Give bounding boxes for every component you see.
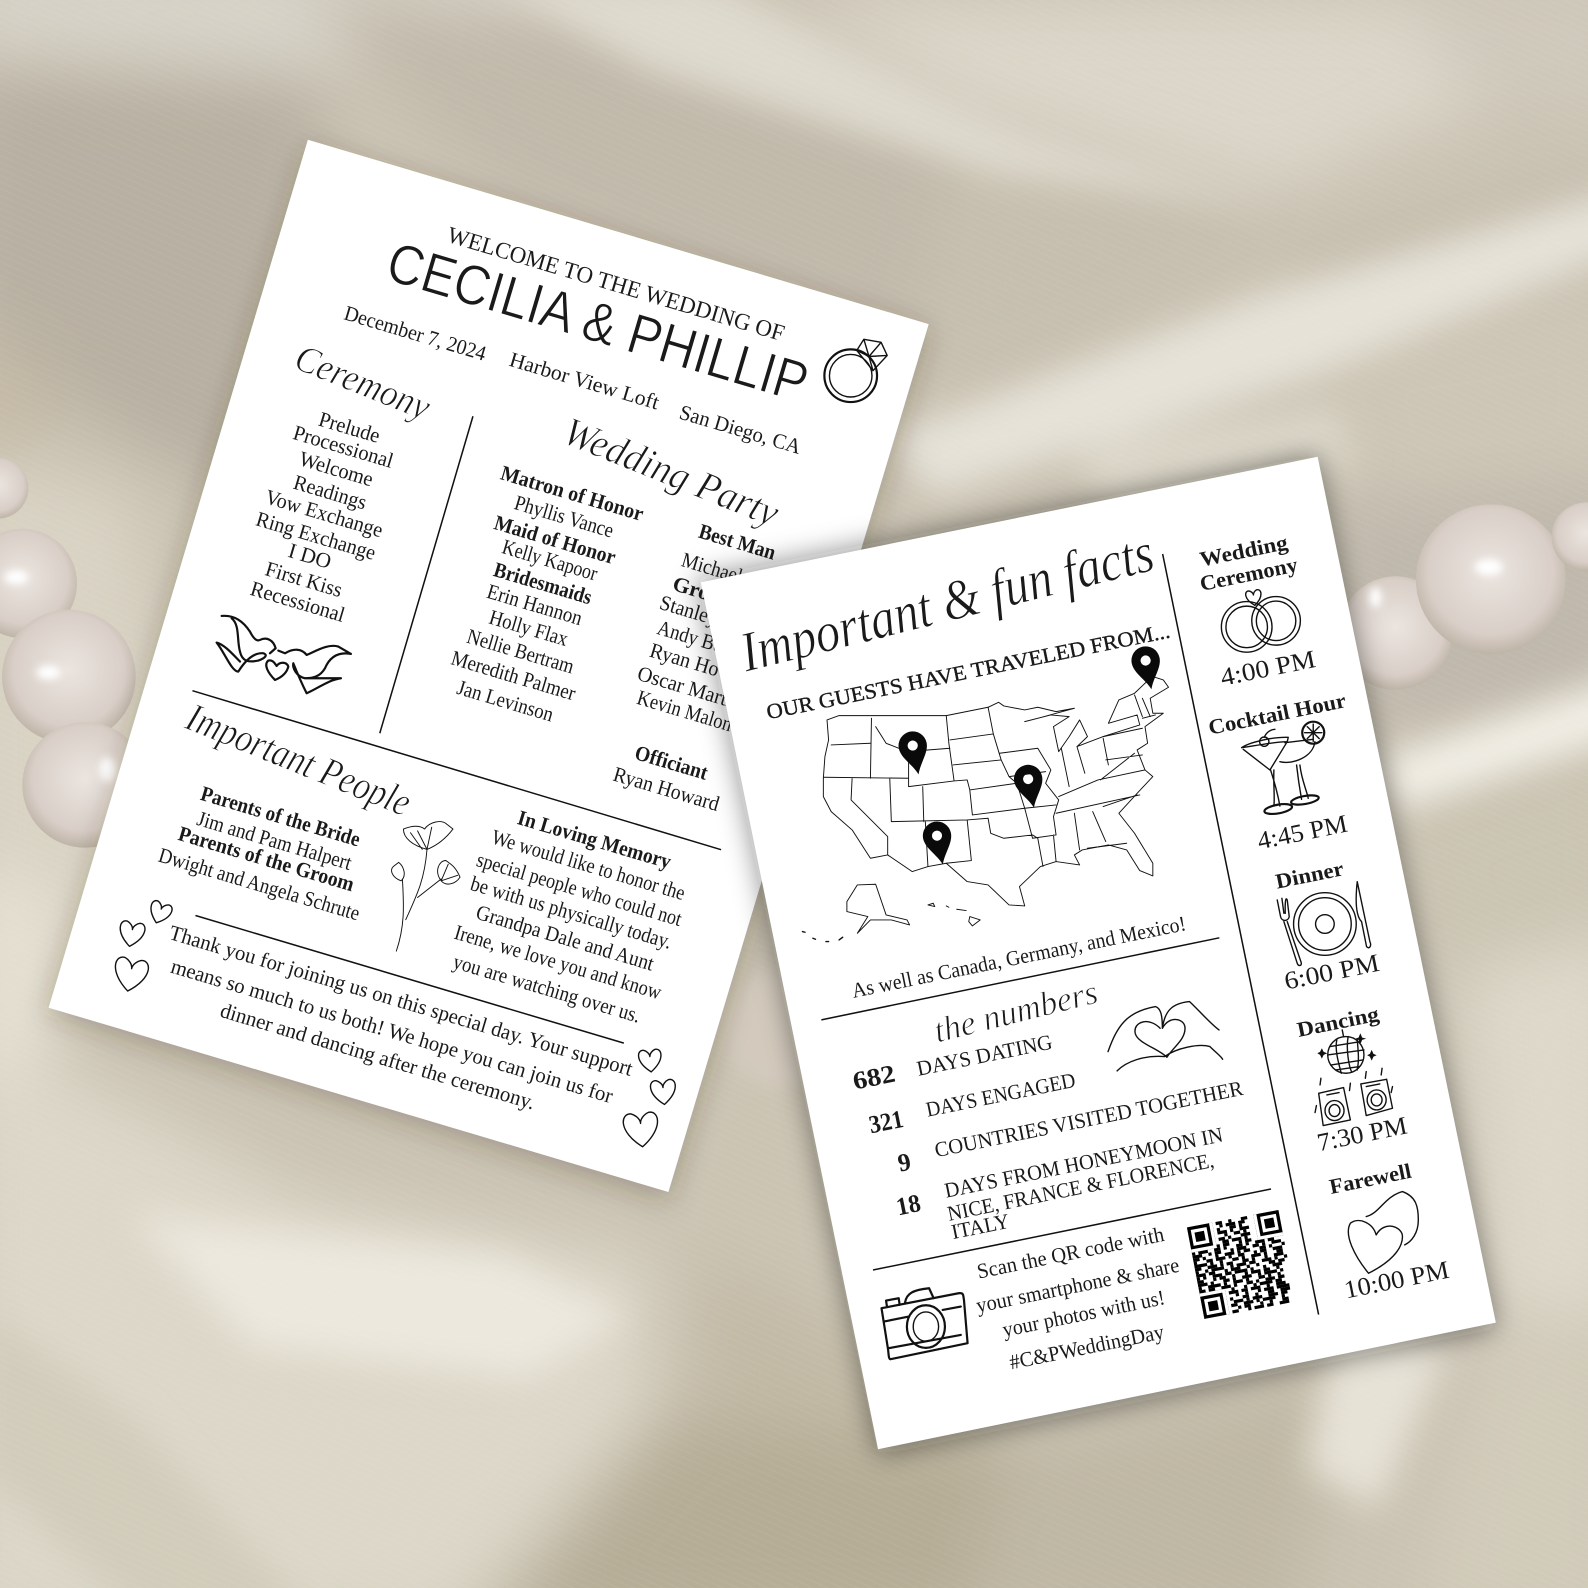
pearls: right strand <box>1339 502 1588 690</box>
wedding party left column: Holly Flax <box>486 605 571 651</box>
wedding party right column: Groomsmen <box>670 571 789 628</box>
parents list <box>156 781 363 925</box>
heading: guests traveled: OUR GUESTS HAVE TRAVELED FROM... <box>764 619 1172 724</box>
icon: line-art flower <box>392 822 460 951</box>
panel: wedding program card <box>49 140 929 1192</box>
schedule: cocktail hour: Cocktail Hour <box>1206 688 1348 740</box>
parents list: Jim and Pam Halpert <box>194 806 355 875</box>
pearl: between cards <box>723 969 841 1087</box>
stat: honeymoon days: DAYS FROM HONEYMOON IN <box>942 1123 1225 1203</box>
caption: other countries: As well as Canada, Germany, and Mexico! <box>850 911 1188 1003</box>
ceremony order list: Readings <box>291 470 369 514</box>
heading: Ceremony: Ceremony <box>289 337 437 429</box>
divider: ceremony column <box>380 416 473 733</box>
schedule: cocktail hour <box>1206 688 1350 855</box>
ceremony order list <box>248 407 396 627</box>
ceremony order list: Recessional <box>248 576 348 627</box>
stat: honeymoon days <box>894 1123 1225 1244</box>
heading: welcome line: WELCOME TO THE WEDDING OF <box>444 222 787 347</box>
wedding party left column: Kelly Kapoor <box>499 535 600 586</box>
heading: Important and fun facts: Important & fun facts <box>733 521 1160 685</box>
wedding party left column: Jan Levinson <box>454 675 557 727</box>
wedding party left column <box>448 461 646 727</box>
parents list: Parents of the Bride <box>198 781 363 851</box>
stat: honeymoon days: 18 <box>894 1189 923 1221</box>
stat: honeymoon days: ITALY <box>949 1209 1012 1244</box>
wedding party right column <box>611 519 789 816</box>
divider: map section <box>821 938 1219 1020</box>
title: couple names: CECILIA & PHILLIP <box>380 231 815 415</box>
photo sharing text: Scan the QR code with <box>975 1222 1167 1284</box>
wedding party right column: Michael Scott <box>679 548 788 601</box>
icon: two hearts <box>1348 1192 1418 1273</box>
icon: hearts right <box>623 1049 677 1148</box>
ceremony order list: Ring Exchange <box>253 507 379 565</box>
event details <box>341 301 805 459</box>
in loving memory text: Irene, we love you and know <box>452 920 665 1004</box>
schedule: farewell: 10:00 PM <box>1342 1256 1451 1304</box>
schedule: wedding ceremony: 4:00 PM <box>1218 645 1318 692</box>
stat: days engaged <box>866 1068 1077 1139</box>
divider: lower section <box>195 916 624 1043</box>
wedding party right column: Kevin Malone <box>634 685 743 739</box>
in loving memory text: special people who could not <box>474 847 685 931</box>
schedule: dancing: Dancing <box>1295 1002 1381 1042</box>
schedule: wedding ceremony: Wedding <box>1198 530 1290 572</box>
schedule: wedding ceremony <box>1198 530 1318 692</box>
ceremony order list: Vow Exchange <box>262 485 386 542</box>
schedule: dinner: Dinner <box>1273 856 1346 894</box>
parents list: Dwight and Angela Schrute <box>156 843 363 925</box>
photo sharing text: your photos with us! <box>1000 1285 1167 1342</box>
photo sharing text <box>974 1222 1181 1374</box>
divider: numbers section <box>873 1189 1271 1270</box>
photo sharing text: #C&PWeddingDay <box>1007 1319 1166 1374</box>
in loving memory text: We would like to honor the <box>489 825 688 905</box>
stat: days engaged: DAYS ENGAGED <box>924 1068 1077 1122</box>
event details: San Diego, CA <box>677 400 805 459</box>
shadow: program card <box>49 146 929 1200</box>
icon: hearts left <box>111 899 173 994</box>
stat: days dating <box>850 1030 1054 1096</box>
in loving memory text <box>450 805 688 1028</box>
schedule: dinner <box>1273 856 1382 996</box>
wedding party left column: Phyllis Vance <box>512 490 617 543</box>
wedding party right column: Stanley Hudson <box>657 590 786 649</box>
icon: wedding rings <box>1221 589 1300 652</box>
icon: disco ball and speakers <box>1315 1030 1393 1126</box>
wedding party right column: Ryan Howard <box>611 762 723 816</box>
wedding party left column: Nellie Bertram <box>464 624 577 679</box>
in loving memory text: be with us physically today. <box>468 871 675 954</box>
divider: schedule column <box>1163 554 1319 1315</box>
pearls: left strand <box>0 458 148 848</box>
thank you message: means so much to us both! We hope you can join us for <box>168 954 616 1108</box>
stat: days dating: DAYS DATING <box>915 1030 1054 1081</box>
heading: Wedding Party: Wedding Party <box>557 408 786 535</box>
schedule: dancing: 7:30 PM <box>1315 1111 1410 1157</box>
event details: Harbor View Loft <box>507 347 662 414</box>
schedule: dinner: 6:00 PM <box>1282 949 1382 996</box>
stat: countries visited: 9 <box>895 1148 913 1178</box>
wedding party right column: Oscar Martinez <box>635 661 763 720</box>
schedule: wedding ceremony: Ceremony <box>1198 553 1300 596</box>
thank you message: Thank you for joining us on this special day. Your support <box>167 920 636 1081</box>
ceremony order list: First Kiss <box>263 557 345 602</box>
icon: diamond ring <box>824 339 887 402</box>
heading: the numbers: the numbers <box>930 973 1101 1050</box>
ceremony order list: I DO <box>286 538 334 574</box>
in loving memory text: Grandpa Dale and Aunt <box>473 900 657 976</box>
ceremony order list: Processional <box>290 420 396 473</box>
in loving memory text: In Loving Memory <box>515 805 674 874</box>
map: Alaska and Hawaii <box>802 884 980 942</box>
wedding party right column: Best Man <box>696 519 779 565</box>
wedding party right column: Ryan Howard <box>647 638 761 693</box>
stat: countries visited: COUNTRIES VISITED TOGETHER <box>932 1076 1246 1162</box>
map: United States outline with state lines <box>823 677 1169 906</box>
icon: cocktail glasses <box>1242 722 1324 816</box>
stat: days engaged: 321 <box>866 1105 906 1139</box>
ceremony order list: Welcome <box>296 447 376 491</box>
schedule: farewell: Farewell <box>1327 1159 1413 1199</box>
ceremony order list: Prelude <box>316 407 383 448</box>
icon: plate, fork and knife <box>1277 882 1371 966</box>
schedule: cocktail hour: 4:45 PM <box>1255 810 1350 855</box>
icon: doves and hearts <box>217 616 351 693</box>
shadow: facts card <box>697 455 1496 1455</box>
stat: honeymoon days: NICE, FRANCE & FLORENCE, <box>945 1148 1216 1226</box>
icon: heart hands <box>1108 1002 1223 1071</box>
facts list <box>850 1030 1246 1244</box>
parents list: Parents of the Groom <box>176 821 357 896</box>
wedding party left column: Meredith Palmer <box>448 646 579 705</box>
wedding party left column: Maid of Honor <box>491 510 619 569</box>
divider: upper section <box>192 691 721 850</box>
panel: important and fun facts card <box>701 457 1496 1449</box>
wedding party left column: Erin Hannon <box>484 579 586 630</box>
icon: camera <box>882 1288 968 1359</box>
QR code <box>1187 1210 1296 1319</box>
event details: December 7, 2024 <box>341 301 489 366</box>
thank you message: dinner and dancing after the ceremony. <box>218 998 538 1114</box>
wedding party right column: Officiant <box>632 740 711 785</box>
stat: days dating: 682 <box>850 1060 898 1096</box>
wedding party right column: Andy Bernard <box>655 615 764 669</box>
schedule: farewell <box>1327 1159 1451 1304</box>
heading: Important People: Important People <box>179 694 418 825</box>
in loving memory text: you are watching over us. <box>450 949 644 1028</box>
wedding party left column: Matron of Honor <box>498 461 646 526</box>
photo sharing text: your smartphone & share <box>974 1253 1181 1318</box>
schedule: dancing <box>1295 1002 1410 1157</box>
map pins <box>896 644 1165 867</box>
wedding party left column: Bridesmaids <box>491 557 595 609</box>
